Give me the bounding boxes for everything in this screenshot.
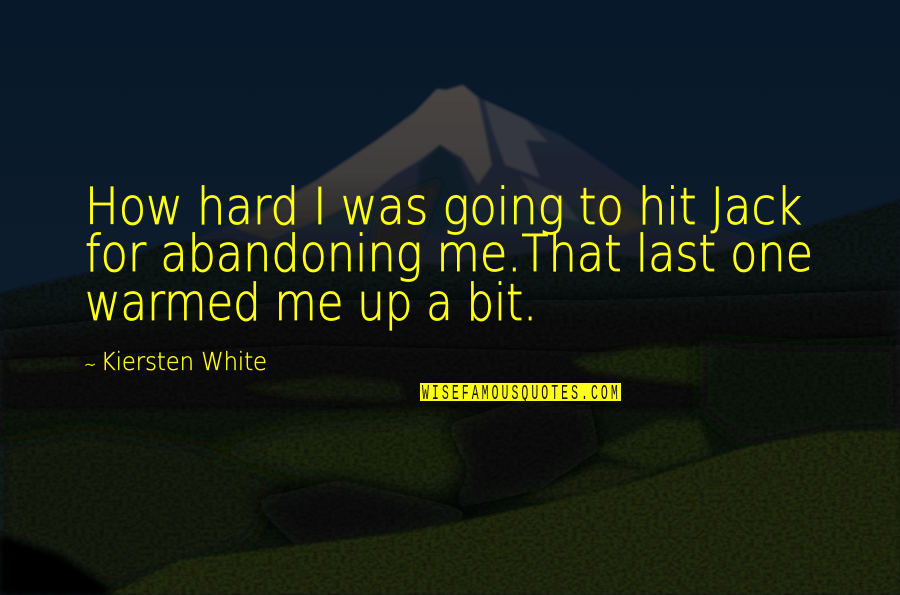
- watermark badge: WISEFAMOUSQUOTES.COM: [422, 383, 618, 406]
- author attribution: ~ Kiersten White: [84, 347, 267, 376]
- quote text: [85, 178, 813, 333]
- background: foliage grain: [0, 195, 900, 595]
- background: dark forested ridges: [0, 200, 900, 440]
- quote text: warmed me up a bit.: [85, 274, 537, 333]
- background: snow-capped mountain: [120, 85, 770, 300]
- background: rolling green pastures: [0, 340, 900, 595]
- quote text: for abandoning me.That last one: [85, 225, 813, 284]
- quote text: How hard I was going to hit Jack: [85, 178, 802, 237]
